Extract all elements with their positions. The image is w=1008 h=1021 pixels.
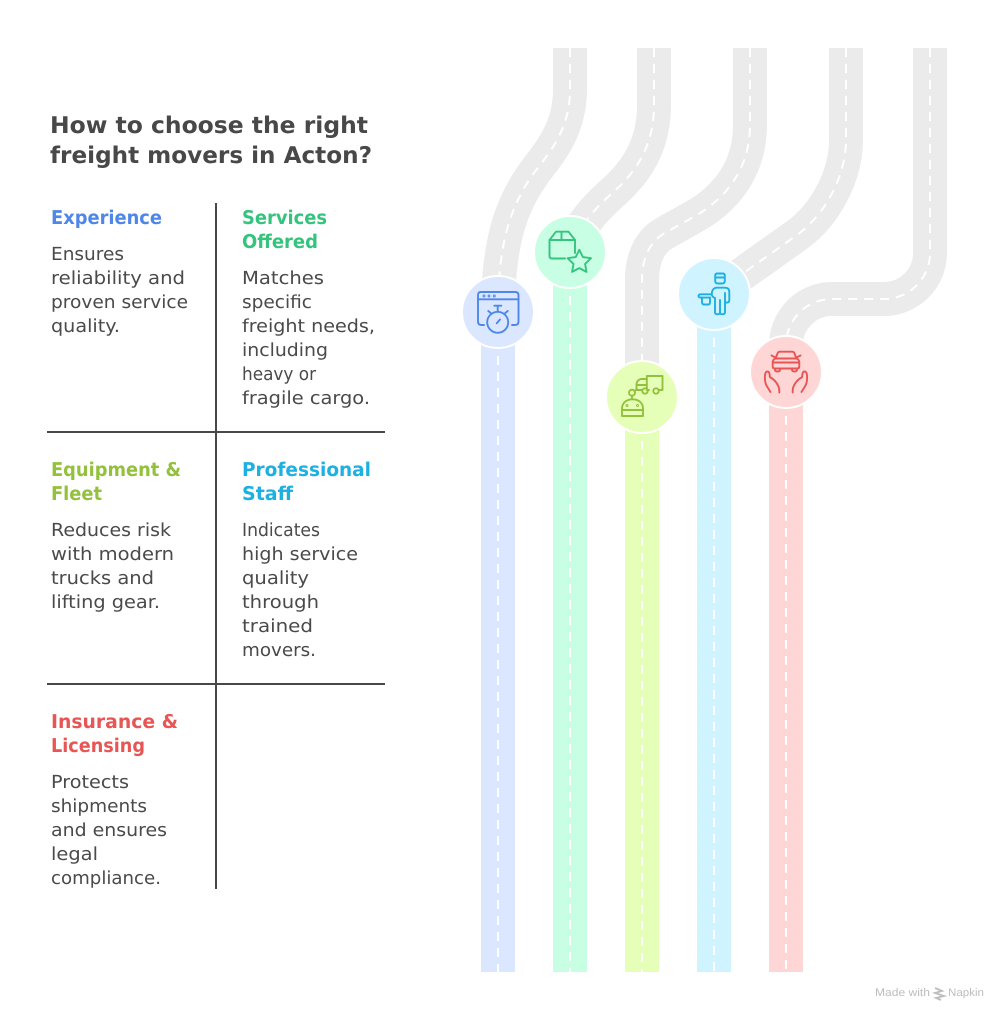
- text block: insurance and licensing: compliance.: [51, 868, 161, 889]
- text block: professional staff: Staff: [242, 483, 294, 505]
- grid dividers: [47, 203, 385, 889]
- text block: professional staff: quality: [242, 568, 309, 589]
- title: How to choose the right: [50, 113, 368, 139]
- text block: equipment and fleet: [51, 459, 181, 613]
- text block: experience: Experience: [51, 207, 162, 229]
- road: services offered: [553, 48, 654, 972]
- icon: truck with robot: [606, 361, 678, 433]
- icon: napkin logo: [935, 988, 944, 1000]
- text block: equipment and fleet: trucks and: [51, 568, 154, 589]
- text block: insurance and licensing: Insurance &: [51, 711, 178, 733]
- icon: car in hands: [750, 336, 822, 408]
- text block: professional staff: high service: [242, 544, 358, 565]
- text block: professional staff: Indicates: [242, 520, 320, 541]
- text block: insurance and licensing: and ensures: [51, 820, 167, 841]
- text block: services offered: specific: [242, 292, 312, 313]
- title: freight movers in Acton?: [50, 143, 372, 169]
- text block: equipment and fleet: with modern: [51, 544, 174, 565]
- title: [50, 113, 372, 169]
- text block: experience: [51, 207, 188, 337]
- road: equipment and fleet: [625, 48, 750, 972]
- text block: insurance and licensing: Protects: [51, 772, 129, 793]
- text block: services offered: freight needs,: [242, 316, 375, 337]
- icon: mover with towel: [678, 258, 750, 330]
- text block: services offered: Matches: [242, 268, 324, 289]
- text block: professional staff: trained: [242, 616, 313, 637]
- text block: services offered: heavy or: [242, 364, 317, 385]
- watermark: Made with: [875, 987, 930, 999]
- text block: insurance and licensing: shipments: [51, 796, 147, 817]
- road: professional staff: [697, 48, 846, 972]
- text block: equipment and fleet: Fleet: [51, 483, 102, 505]
- text block: insurance and licensing: Licensing: [51, 735, 145, 757]
- text block: services offered: including: [242, 340, 328, 361]
- text block: professional staff: Professional: [242, 459, 371, 481]
- text block: insurance and licensing: [51, 711, 178, 889]
- text block: equipment and fleet: Equipment &: [51, 459, 181, 481]
- text block: experience: reliability and: [51, 268, 185, 289]
- watermark: Napkin: [948, 987, 984, 999]
- text block: experience: proven service: [51, 292, 188, 313]
- text block: services offered: Services: [242, 207, 327, 229]
- watermark: [875, 987, 984, 1000]
- road: insurance and licensing: [769, 48, 930, 972]
- icon: box with star: [534, 216, 606, 288]
- icon: window with stopwatch: [462, 276, 534, 348]
- text block: professional staff: [242, 459, 371, 661]
- road: experience: [481, 48, 570, 972]
- text block: equipment and fleet: lifting gear.: [51, 592, 160, 613]
- text block: insurance and licensing: legal: [51, 844, 98, 865]
- text block: services offered: [242, 207, 375, 409]
- text block: experience: quality.: [51, 316, 120, 337]
- text block: experience: Ensures: [51, 244, 124, 265]
- text block: services offered: fragile cargo.: [242, 388, 370, 409]
- text block: services offered: Offered: [242, 231, 318, 253]
- text block: equipment and fleet: Reduces risk: [51, 520, 172, 541]
- text block: professional staff: movers.: [242, 640, 316, 661]
- text block: professional staff: through: [242, 592, 319, 613]
